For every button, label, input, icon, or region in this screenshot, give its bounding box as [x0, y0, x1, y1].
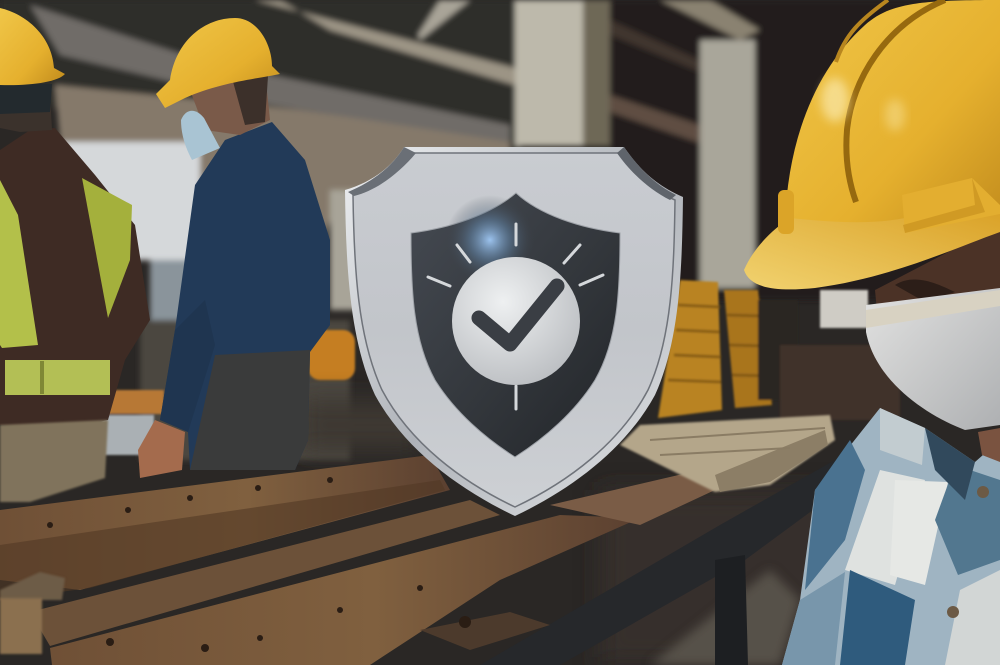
shield dark inner emblem — [411, 193, 620, 457]
icon: middle worker yellow helmet — [156, 18, 280, 108]
emblem light rays — [428, 224, 603, 409]
icon: right worker yellow helmet — [744, 0, 1000, 289]
plank bolt holes — [47, 477, 471, 652]
emblem white disc — [452, 257, 580, 385]
icon: check mark — [479, 286, 557, 344]
shield face — [353, 153, 675, 507]
distant orange stacked material — [102, 280, 900, 455]
shield outer rim — [345, 147, 683, 516]
shield badge — [345, 147, 683, 516]
plaid shirt — [782, 408, 1000, 665]
worker: left, high-visibility vest — [0, 8, 150, 502]
emblem blue glow — [445, 195, 535, 285]
shield top bevel — [348, 147, 416, 196]
worker: middle, blue shirt and surgical mask — [138, 18, 330, 478]
icon: left worker yellow helmet — [0, 8, 65, 85]
workbench: timber planks and steel frame — [0, 415, 840, 665]
icon: right worker face mask — [866, 288, 1000, 430]
worker: right foreground, plaid shirt and face mask — [744, 0, 1000, 665]
